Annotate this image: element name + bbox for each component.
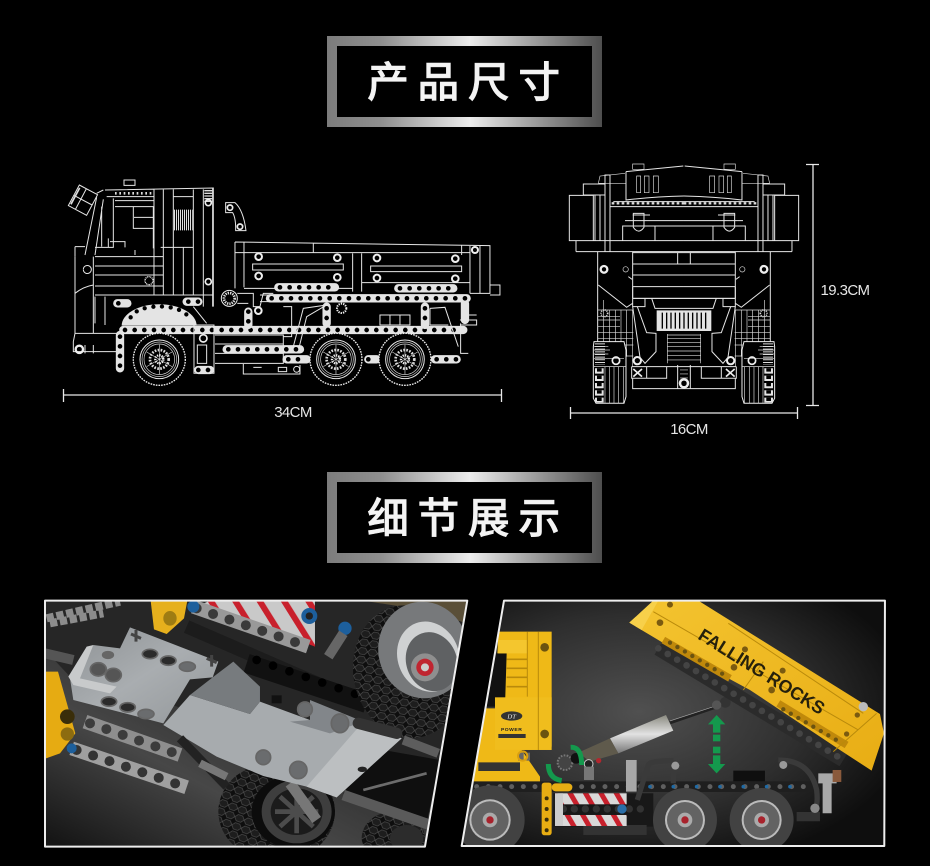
heading frame [327, 36, 602, 127]
wheel: rear 1 [310, 333, 362, 385]
wheel: front [133, 333, 185, 385]
hydraulic cylinder [558, 697, 731, 780]
label: 34CM: 34CM [274, 404, 312, 421]
rear frame arcs [637, 760, 817, 810]
cab: DT [506, 713, 517, 720]
heading: detail display [327, 472, 602, 563]
dump bed [221, 203, 500, 353]
photo panel: raised dump bed detail [455, 600, 887, 855]
label: 16CM: 16CM [670, 421, 708, 438]
yellow connectors [151, 601, 187, 634]
chassis beam [473, 760, 820, 835]
heading text: 细节展示 [367, 495, 569, 542]
module holes [90, 649, 349, 779]
arrow: curved rotation upper [571, 747, 582, 765]
label: 19.3CM: 19.3CM [821, 282, 870, 299]
lower frame [343, 750, 440, 823]
bottom tire [218, 770, 335, 846]
front fender [122, 304, 207, 326]
right half [680, 164, 799, 403]
dimension: length [63, 389, 502, 421]
raised dump bed [629, 601, 884, 771]
heading frame [327, 472, 602, 563]
dimension: width [570, 407, 798, 438]
yellow upright [542, 783, 552, 835]
hazard plate [197, 601, 315, 647]
cab [73, 180, 213, 353]
wheels [463, 786, 794, 845]
top left beams [47, 602, 120, 623]
heading: product size [327, 36, 602, 127]
logo [501, 711, 522, 721]
lower studded beams [85, 722, 180, 755]
left half [569, 164, 688, 403]
panel border [45, 601, 467, 847]
cab [470, 632, 552, 783]
grey gearbox module [70, 627, 218, 723]
arrow: curved rotation lower [548, 764, 562, 781]
cab: POWER [501, 727, 522, 733]
bed lettering: FALLING ROCKS [695, 625, 828, 719]
panel border [462, 601, 885, 846]
photo panel: underside gearbox detail [45, 595, 476, 865]
side view truck line drawing [68, 180, 500, 385]
silver T part [818, 773, 837, 813]
top right tire [353, 605, 451, 738]
dimension: height [806, 164, 870, 406]
dark background parts [46, 602, 462, 760]
studded beam top [193, 607, 308, 647]
heading text: 产品尺寸 [367, 59, 569, 106]
front view truck line drawing [569, 164, 799, 403]
hazard plates [555, 793, 627, 804]
chassis frame beams [117, 302, 463, 374]
icon: visor [68, 185, 98, 215]
arrow: vertical lift [708, 715, 725, 773]
wheel: rear 2 [379, 333, 431, 385]
black studded beam [184, 621, 318, 677]
